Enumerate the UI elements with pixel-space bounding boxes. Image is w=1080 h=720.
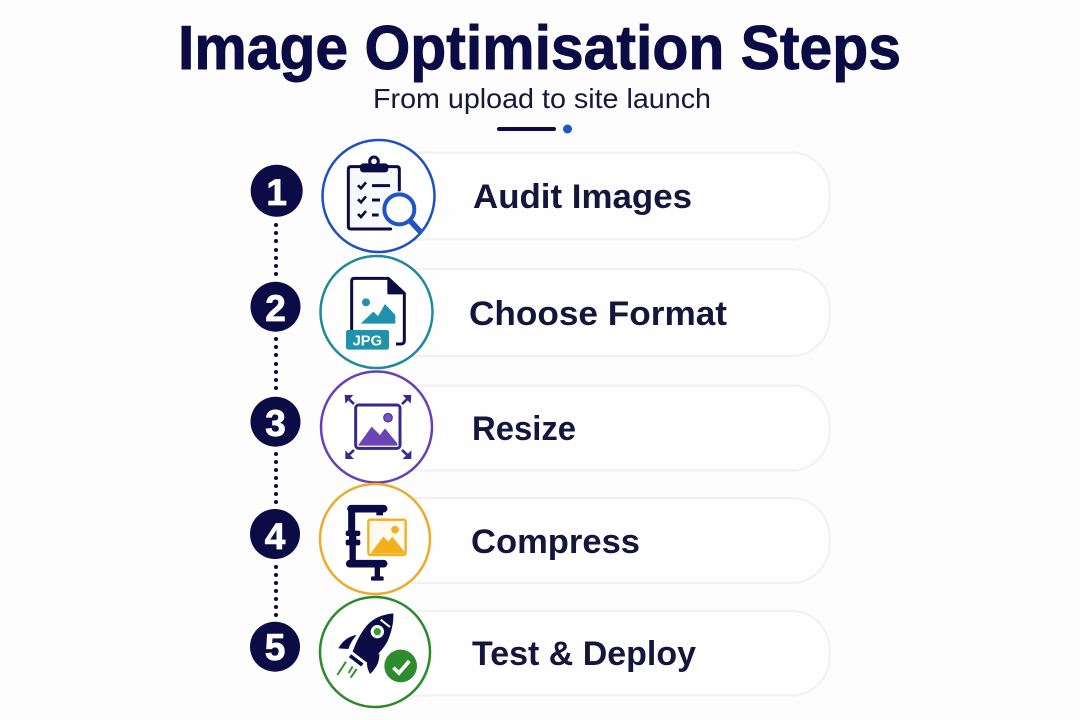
step 5 number: 5 bbox=[265, 627, 285, 668]
step 2 pill bbox=[370, 269, 830, 356]
step 2 number: 2 bbox=[265, 288, 286, 329]
step 5: test and deploy bbox=[250, 597, 830, 707]
step 3 label: Resize bbox=[472, 410, 576, 448]
step 3 pill bbox=[370, 386, 830, 470]
step 5 label: Test & Deploy bbox=[472, 635, 696, 673]
step 3 number bbox=[250, 397, 300, 447]
step 4 label: Compress bbox=[471, 523, 640, 561]
step 2 number bbox=[250, 282, 300, 332]
step 2 icon circle bbox=[320, 256, 432, 368]
icon: jpg file bbox=[346, 278, 404, 350]
step 1: audit images bbox=[251, 140, 830, 252]
step 4 pill bbox=[370, 498, 830, 583]
step 3 number: 3 bbox=[265, 403, 286, 444]
step 3 icon circle bbox=[321, 372, 432, 482]
step 4 icon circle bbox=[320, 484, 430, 594]
step 1 pill bbox=[370, 152, 830, 240]
step 3: resize bbox=[250, 372, 830, 482]
step 2 label: Choose Format bbox=[469, 295, 727, 333]
step 4: compress bbox=[250, 484, 830, 594]
step 1 number bbox=[251, 165, 303, 217]
step 1 number: 1 bbox=[266, 172, 287, 213]
dotted connector bbox=[274, 223, 278, 617]
step 4 number: 4 bbox=[265, 516, 286, 557]
step 2: choose format bbox=[250, 256, 830, 368]
icon: rocket with check badge bbox=[337, 613, 417, 682]
subtitle: From upload to site launch bbox=[373, 83, 711, 114]
step 5 pill bbox=[370, 611, 830, 696]
icon: clamp compressing image bbox=[346, 509, 406, 581]
step 1 icon circle bbox=[322, 140, 434, 252]
step 4 number bbox=[250, 509, 300, 559]
step 1 label: Audit Images bbox=[473, 178, 692, 216]
step 5 number bbox=[250, 622, 300, 672]
step 5 icon circle bbox=[320, 597, 430, 707]
icon: resize image bbox=[345, 395, 411, 459]
title accent bbox=[499, 124, 572, 134]
title: Image Optimisation Steps bbox=[178, 14, 901, 83]
icon: clipboard with magnifier bbox=[348, 157, 420, 231]
icon: jpg file: JPG bbox=[353, 333, 382, 349]
